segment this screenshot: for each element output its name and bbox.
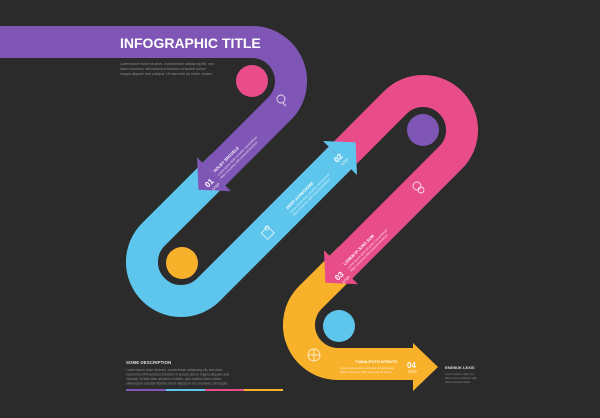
step 02 text: Lorem ipsum dolor sit amet, consectetuer — [289, 172, 331, 214]
step 03 text — [331, 224, 393, 286]
title description: Lorem ipsum dolor sit amet, consectetuer adipiscing elit, sed — [120, 62, 214, 66]
step 03 text: 03 — [333, 269, 346, 282]
step 03 text: STEP — [342, 275, 351, 285]
circle: purple — [407, 114, 439, 146]
band: purple step 01 — [0, 42, 291, 191]
icon: lightbulb — [277, 95, 286, 106]
band: yellow step 04 — [299, 258, 438, 391]
step 02 text: ZREFI ACRECIOME — [285, 180, 315, 210]
title description: magna aliquam erat volutpat. Ut wisi enim ad minim veniam — [120, 72, 212, 76]
icon: chat — [413, 182, 424, 193]
step 03 text: diam nonummy nibh euismod tincidunt — [349, 233, 388, 273]
step 01 text: HOLBY SROVELE — [212, 145, 240, 173]
step 04 text: 04 — [407, 361, 416, 370]
bottom description: ullamcorper suscipit lobortis nisl ut aliquip ex ea commodo consequat — [126, 382, 227, 386]
icon: globe — [308, 349, 320, 361]
step 02 text: 02 — [332, 151, 345, 164]
band: cyan step 02 — [142, 141, 357, 301]
step 02 text: diam nonummy nibh euismod tincidunt — [292, 178, 331, 217]
title: INFOGRAPHIC TITLE — [120, 35, 261, 51]
step 04 text: Lorem ipsum dolor sit amet consectetuer — [340, 366, 394, 370]
right note — [445, 365, 477, 384]
bottom description: SOME DESCRIPTION — [126, 360, 171, 365]
step 02 text — [284, 150, 351, 217]
step 01 text: diam nonummy nibh euismod tincidunt — [219, 140, 258, 180]
step 01 text: STEP — [212, 182, 221, 192]
step 01 text — [201, 131, 263, 193]
step 01 text: 01 — [203, 176, 216, 189]
right note: Lorem ipsum dolor sit — [445, 372, 474, 376]
circle: pink — [236, 65, 268, 97]
title description — [120, 62, 214, 76]
right note: ENEBUK LEXIS — [445, 365, 475, 370]
bottom description — [126, 360, 283, 391]
step 03 text: LOREM IP JURO SUM — [342, 233, 376, 266]
right note: nibh euismod dolor — [445, 380, 470, 384]
step 04 text: STEP — [408, 370, 418, 374]
step 04 text: diam nonummy nibh euismod tincidunt — [340, 370, 391, 374]
title description: diam nonummy nibh euismod tincidunt ut laoreet dolore — [120, 67, 206, 71]
step 04 text: TUNALPOTO NTENTO — [355, 359, 397, 364]
bottom description: Lorem ipsum dolor sit amet, consectetuer adipiscing elit, sed diam — [126, 368, 223, 372]
step 01 text: Lorem ipsum dolor sit amet, consectetuer — [216, 135, 258, 177]
bottom description: volutpat. Ut wisi enim ad minim veniam, quis nostrud exerci tation — [126, 377, 222, 381]
right note: amet cons ectetuer adip — [445, 376, 477, 380]
band: pink step 03 — [324, 91, 462, 284]
circle: cyan — [323, 310, 355, 342]
step 02 text: STEP — [341, 157, 350, 167]
step 03 text: Lorem ipsum dolor sit amet, consectetuer — [346, 228, 388, 270]
icon: puzzle — [261, 226, 274, 239]
step 04 text — [340, 359, 418, 374]
circle: orange — [166, 247, 198, 279]
bottom description: nonummy nibh euismod tincidunt ut laoreet dolore magna aliquam erat — [126, 372, 229, 376]
